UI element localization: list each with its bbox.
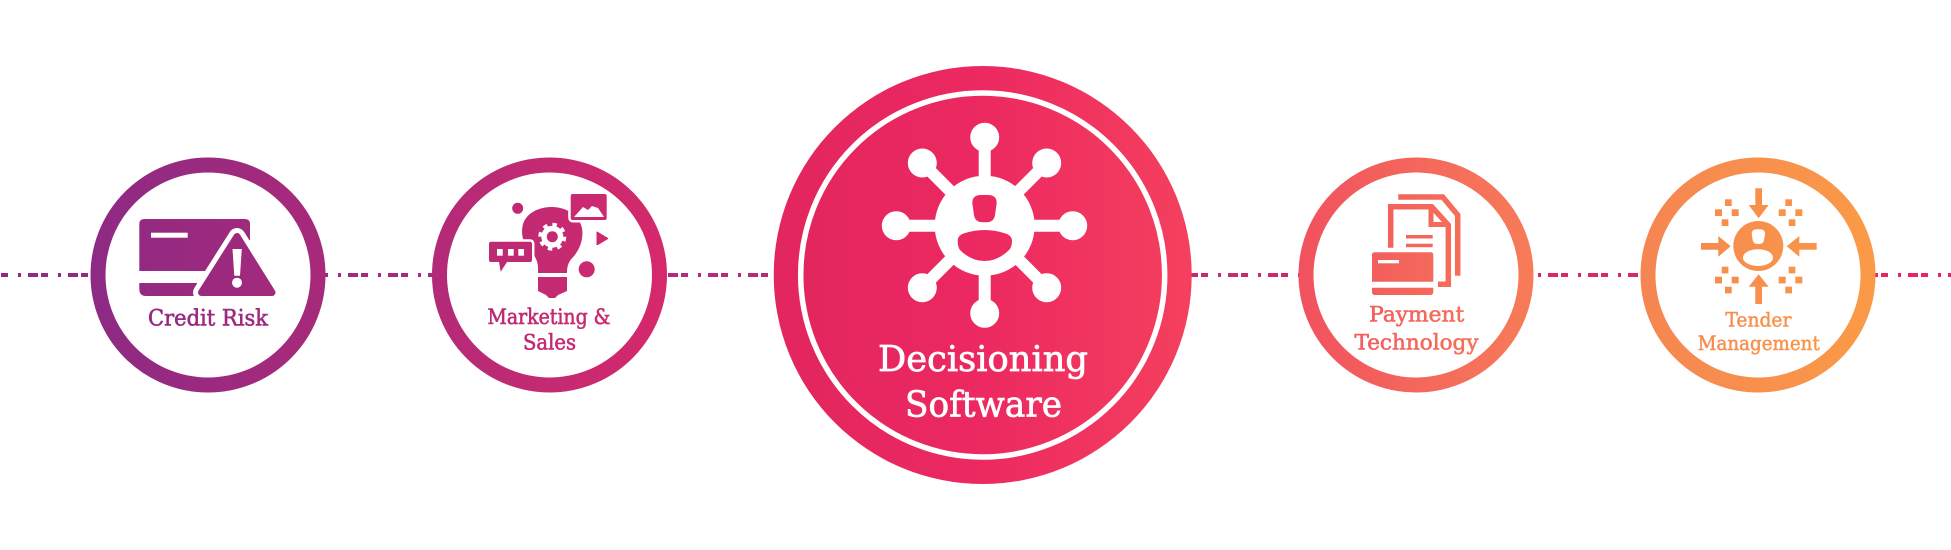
node: Decisioning Software xyxy=(774,66,1192,484)
icon: light bulb with gear, chat and image xyxy=(489,194,608,298)
icon: person with converging arrows xyxy=(1701,188,1817,304)
label: Decisioning xyxy=(878,339,1088,380)
icon: credit card with warning triangle xyxy=(139,219,272,296)
node: Payment Technology xyxy=(1306,165,1526,385)
label xyxy=(1354,303,1479,355)
node: Tender Management xyxy=(1648,165,1868,385)
label: Payment xyxy=(1369,303,1465,328)
label: Tender xyxy=(1725,309,1792,332)
ring xyxy=(98,165,318,385)
label xyxy=(878,339,1088,426)
inner white ring xyxy=(801,93,1165,457)
label xyxy=(488,305,610,355)
ring xyxy=(1648,165,1868,385)
label xyxy=(1698,309,1820,355)
node: Marketing & Sales xyxy=(440,165,660,385)
label: Credit Risk xyxy=(148,307,269,332)
label: Management xyxy=(1698,332,1820,355)
ring xyxy=(440,165,660,385)
ring xyxy=(1306,165,1526,385)
node: Credit Risk xyxy=(98,165,318,385)
icon: network hub with person xyxy=(882,123,1087,328)
label: Technology xyxy=(1354,330,1479,355)
icon: documents and card xyxy=(1372,197,1458,295)
label: Software xyxy=(905,385,1062,426)
label: Sales xyxy=(523,330,576,355)
disc xyxy=(774,66,1192,484)
connector: dashed line xyxy=(0,273,1951,277)
label: Marketing & xyxy=(488,305,610,330)
